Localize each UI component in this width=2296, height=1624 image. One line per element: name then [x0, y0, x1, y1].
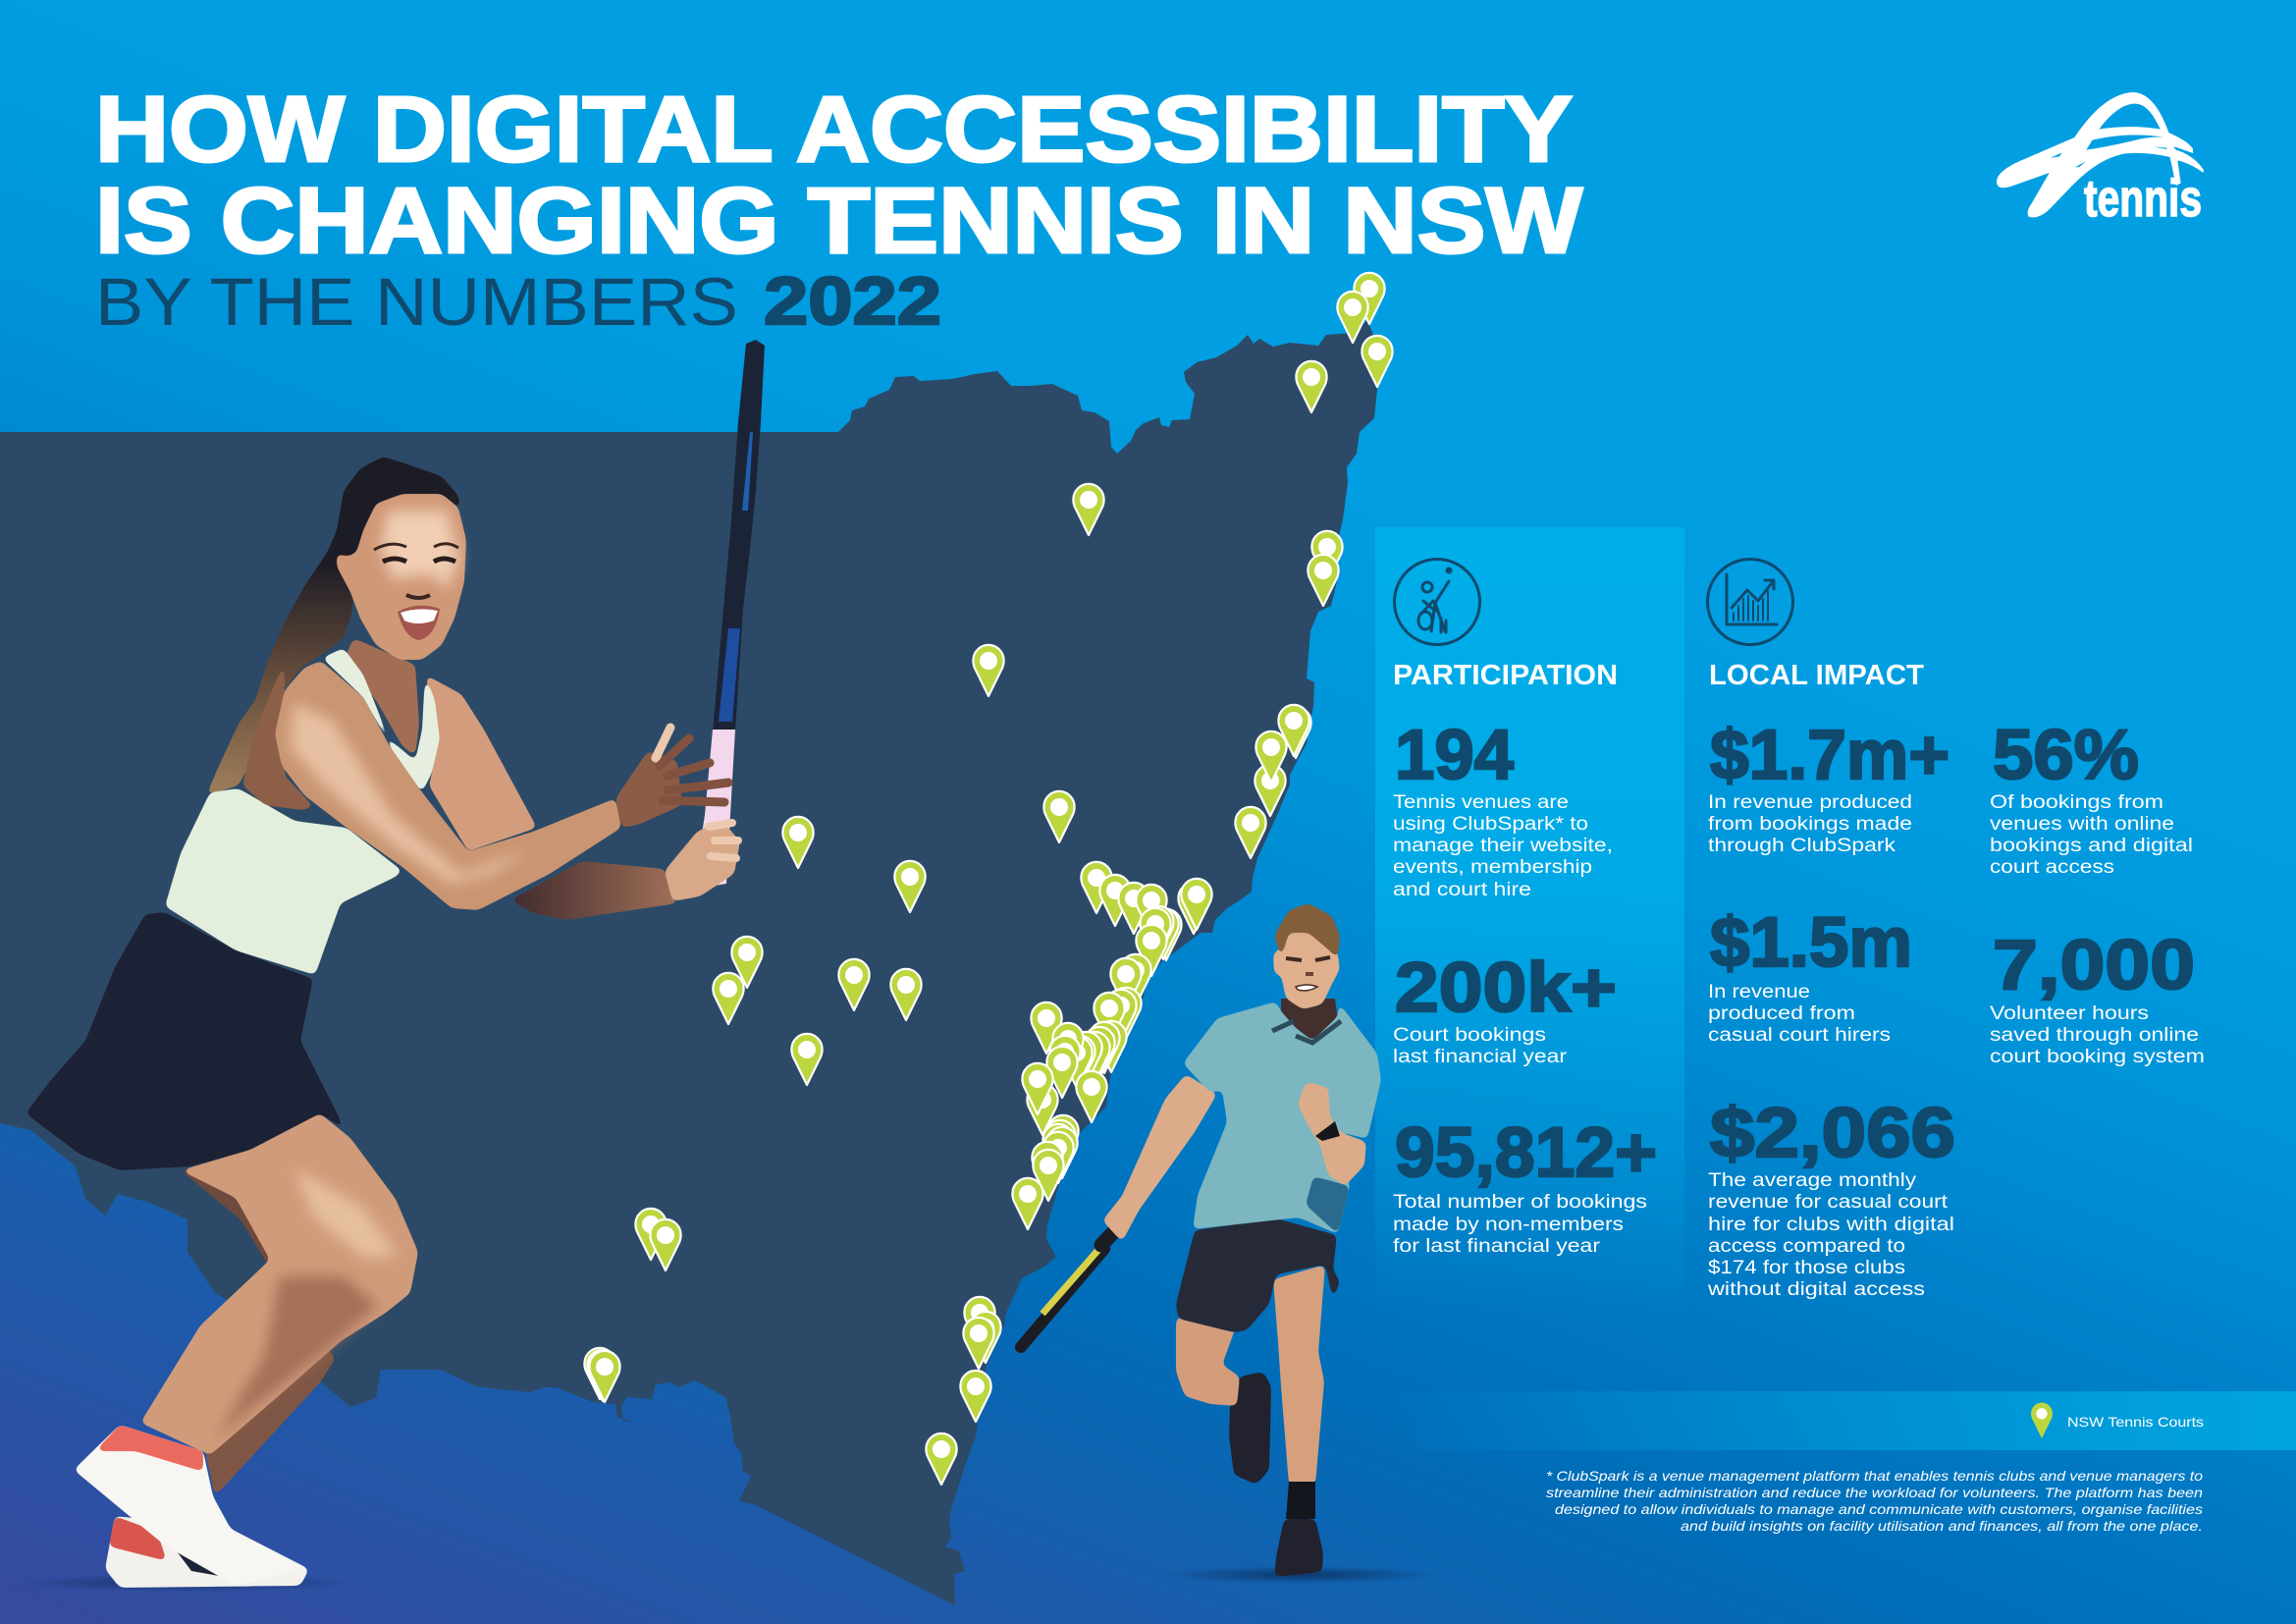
stat: 56% of bookings	[1990, 717, 2193, 878]
head and hair	[1273, 903, 1340, 1009]
stat: 56% of bookings: 56%	[1993, 717, 2139, 794]
stat: 200k+ court bookings	[1393, 949, 1617, 1067]
stat: 56% of bookings: court access	[1990, 857, 2114, 878]
stat: $1.5m casual hire revenue: In revenue	[1708, 982, 1810, 1002]
stat: $2,066 monthly revenue: hire for clubs with digital	[1708, 1215, 1954, 1235]
stat: 194 venues: events, membership	[1393, 857, 1592, 878]
stat: 56% of bookings: Of bookings from	[1990, 792, 2163, 813]
hair and ponytail	[206, 457, 467, 795]
sock and front shoe	[1286, 1482, 1315, 1519]
heading: participation: PARTICIPATION	[1393, 660, 1618, 691]
stat: $1.5m casual hire revenue: $1.5m	[1710, 904, 1912, 982]
left arm and fist	[1298, 1082, 1366, 1186]
shoes	[74, 1425, 309, 1588]
stat: $2,066 monthly revenue: The average monthly	[1708, 1170, 1917, 1191]
stat: $2,066 monthly revenue: access compared to	[1708, 1236, 1905, 1257]
title: IS CHANGING TENNIS IN NSW	[95, 169, 1582, 273]
legend	[2031, 1403, 2204, 1438]
panel: participation background	[1375, 527, 1684, 1316]
facial features	[1286, 957, 1330, 960]
back shoe	[1229, 1372, 1271, 1485]
map pins	[584, 273, 1393, 1485]
stat: 7,000 volunteer hours: saved through online	[1990, 1025, 2199, 1046]
icon: tennis player in circle	[1394, 560, 1480, 644]
stat: 200k+ court bookings: Court bookings	[1393, 1025, 1546, 1046]
stat: $2,066 monthly revenue: $174 for those clubs	[1708, 1258, 1905, 1278]
stat: $2,066 monthly revenue: without digital access	[1707, 1279, 1925, 1300]
stat: 194 venues: and court hire	[1393, 880, 1531, 900]
stat: 56% of bookings: bookings and digital	[1990, 836, 2193, 856]
logo: Tennis NSW: tennis	[2084, 170, 2202, 228]
stat: $1.7m+ revenue: $1.7m+	[1710, 717, 1949, 794]
shorts	[1176, 1218, 1340, 1332]
tank top	[165, 648, 440, 975]
title: HOW DIGITAL ACCESSIBILITY	[95, 78, 1573, 182]
back of torso	[242, 661, 314, 810]
legend bar background	[1374, 1391, 2296, 1450]
legend: NSW Tennis Courts	[2067, 1414, 2204, 1430]
stat: 95,812+ non-member bookings: for last financial year	[1393, 1236, 1601, 1257]
footnote: * ClubSpark is a venue management platform that enables tennis clubs and venue managers to	[1546, 1468, 2203, 1484]
stat: 7,000 volunteer hours: 7,000	[1993, 927, 2195, 1004]
stat: 95,812+ non-member bookings: 95,812+	[1395, 1114, 1657, 1192]
photo cut-out: female tennis player	[20, 340, 765, 1592]
front arm	[275, 661, 728, 910]
neck and chest	[344, 638, 419, 756]
stat: 200k+ court bookings: last financial year	[1393, 1047, 1568, 1067]
stat: $1.5m casual hire revenue	[1708, 904, 1912, 1046]
map of NSW	[0, 320, 1377, 1605]
title	[95, 78, 1582, 273]
stat: $1.7m+ revenue: from bookings made	[1708, 814, 1912, 835]
icon: legend pin	[2031, 1403, 2053, 1438]
panel: participation	[1393, 560, 1657, 1257]
photo cut-out: male tennis player	[1021, 903, 1438, 1584]
face	[337, 494, 466, 660]
rear forearm and hand	[510, 820, 740, 920]
subtitle	[95, 263, 941, 340]
heading: local impact: LOCAL IMPACT	[1709, 660, 1924, 691]
panel: local impact	[1707, 560, 2205, 1300]
stat: 194 venues: Tennis venues are	[1393, 792, 1569, 813]
legs	[140, 1113, 418, 1496]
stat: 7,000 volunteer hours: Volunteer hours	[1990, 1003, 2149, 1024]
stat: $1.7m+ revenue: through ClubSpark	[1708, 836, 1896, 856]
stat: $1.7m+ revenue	[1708, 717, 1949, 856]
shirt	[1183, 1001, 1381, 1234]
stat: 7,000 volunteer hours	[1990, 927, 2205, 1067]
rear upper arm	[425, 675, 537, 851]
footnote: designed to allow individuals to manage and communicate with customers, organise facilities	[1555, 1501, 2203, 1517]
stat: $1.5m casual hire revenue: produced from	[1708, 1003, 1855, 1024]
stat: 194 venues: 194	[1395, 717, 1515, 794]
stat: $1.5m casual hire revenue: casual court hirers	[1708, 1025, 1891, 1046]
stat: 7,000 volunteer hours: court booking system	[1990, 1047, 2205, 1067]
facial features	[374, 544, 458, 550]
skirt	[26, 912, 346, 1170]
neck	[1281, 999, 1338, 1041]
subtitle: 2022	[764, 263, 941, 339]
racket	[1021, 1228, 1117, 1347]
stat: 56% of bookings: venues with online	[1990, 814, 2174, 835]
stat: 95,812+ non-member bookings	[1393, 1114, 1657, 1257]
stat: 194 venues: using ClubSpark* to	[1393, 814, 1588, 835]
stat: $2,066 monthly revenue	[1707, 1095, 1955, 1300]
right arm	[1102, 1074, 1217, 1242]
logo: Tennis NSW	[1997, 92, 2204, 228]
stat: 194 venues: manage their website,	[1393, 836, 1613, 856]
stat: $2,066 monthly revenue: revenue for casual court	[1708, 1192, 1949, 1213]
stat: 194 venues	[1393, 717, 1613, 900]
footnote: and build insights on facility utilisation and finances, all from the one place.	[1681, 1518, 2203, 1534]
stat: $1.7m+ revenue: In revenue produced	[1708, 792, 1912, 813]
footnote	[1546, 1468, 2203, 1534]
stat: $2,066 monthly revenue: $2,066	[1710, 1095, 1955, 1172]
racket	[695, 340, 765, 887]
footnote: streamline their administration and reduce the workload for volunteers. The platform has been	[1546, 1485, 2203, 1500]
stat: 95,812+ non-member bookings: Total number of bookings	[1393, 1192, 1647, 1213]
icon: rising chart in circle	[1708, 560, 1792, 644]
stat: 200k+ court bookings: 200k+	[1395, 949, 1617, 1027]
subtitle: BY THE NUMBERS	[95, 264, 738, 340]
legs	[1176, 1299, 1240, 1406]
stat: 95,812+ non-member bookings: made by non-members	[1393, 1215, 1624, 1235]
